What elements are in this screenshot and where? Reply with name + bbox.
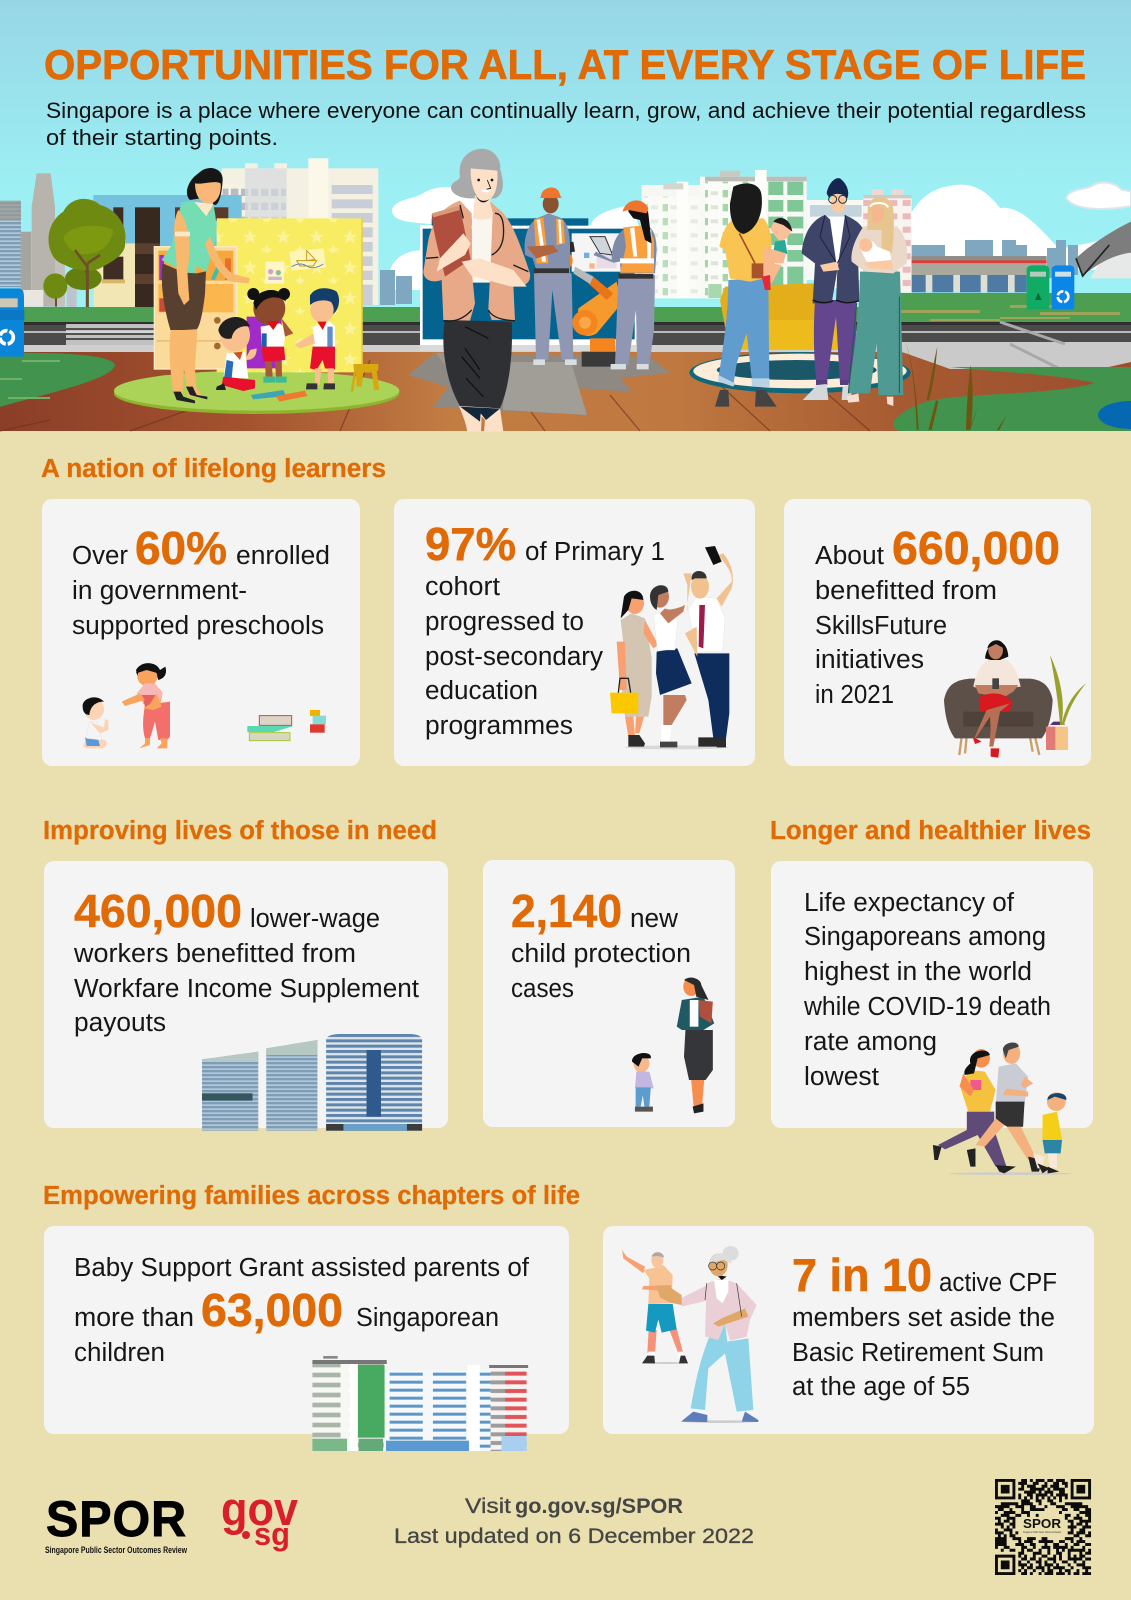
left lawn (0, 353, 115, 407)
stat text: of Primary 1 (525, 538, 665, 566)
billboard and workers (420, 149, 657, 432)
woman with hijab and baby (847, 197, 907, 406)
stat text: lowest (804, 1063, 879, 1091)
footer text: Visit (465, 1494, 511, 1518)
icon: seniors exercising (622, 1246, 758, 1423)
stat text: benefitted from (815, 577, 997, 605)
blue building (93, 195, 242, 307)
stat text (425, 518, 665, 740)
right apartment blocks (642, 170, 912, 298)
central woman with book (423, 149, 530, 432)
stat text: while COVID-19 death (803, 993, 1051, 1021)
stat text: more than (74, 1304, 194, 1332)
footer text (394, 1494, 754, 1548)
logo: SPOR: SPOR (46, 1491, 187, 1547)
heading: longer and healthier lives: Longer and healthier lives (770, 817, 1091, 845)
stat text: 2,140 (511, 885, 622, 937)
dark tower (0, 201, 21, 287)
central paving (408, 353, 670, 415)
stat text: programmes (425, 712, 573, 740)
stat text (815, 522, 1060, 709)
icon: students taking a selfie (610, 546, 733, 749)
blue recycling bin (0, 288, 24, 357)
stat text: initiatives (815, 646, 924, 674)
older woman (691, 1323, 753, 1412)
stat text: active CPF (939, 1269, 1057, 1297)
stat text: payouts (74, 1009, 166, 1037)
stat text: 63,000 (201, 1284, 343, 1336)
stat text: in 2021 (815, 681, 894, 709)
stat text: members set aside the (792, 1304, 1055, 1332)
distant train viaduct (912, 222, 1131, 309)
white apartment block (222, 168, 378, 305)
icon: children and toys (83, 663, 326, 748)
worker with tablet (590, 200, 657, 369)
stat text (74, 1254, 530, 1367)
child carried (771, 221, 792, 240)
stat text: at the age of 55 (792, 1373, 970, 1401)
stat text: enrolled (236, 542, 330, 570)
purple bag (247, 317, 282, 368)
stat text: workers benefitted from (73, 940, 356, 968)
clouds (390, 183, 1131, 290)
stat text: Basic Retirement Sum (792, 1339, 1044, 1367)
heading: lifelong learners: A nation of lifelong learners (41, 455, 386, 483)
footer text: Last updated on 6 December 2022 (394, 1524, 754, 1548)
stat text: in government- (72, 577, 247, 605)
stat text: 460,000 (74, 885, 242, 937)
icon: social worker and child (632, 977, 714, 1113)
stat text: 97% (425, 518, 516, 570)
student middle (656, 648, 692, 695)
icon: family jogging (933, 1043, 1071, 1175)
hero illustration (0, 0, 1131, 432)
family group (689, 178, 1006, 430)
stat text (72, 522, 330, 640)
logo: SPOR: Singapore Public Sector Outcomes Review (45, 1545, 187, 1556)
stat text: 7 in 10 (792, 1249, 932, 1301)
panel: SkillsFuture (784, 499, 1091, 766)
rug (114, 373, 399, 414)
worker with helmet (525, 188, 577, 365)
books on rug (251, 390, 286, 399)
stat text: post-secondary (425, 643, 603, 671)
stadium roof (1076, 222, 1131, 276)
stat text: Singaporeans among (804, 923, 1046, 951)
woman seen from behind (715, 183, 792, 407)
billboard (420, 225, 637, 345)
stat text: Over (72, 542, 129, 570)
robot arm (543, 242, 622, 367)
stat text: SkillsFuture (815, 612, 947, 640)
stat text (803, 889, 1051, 1091)
round mat (689, 352, 911, 393)
logo: gov.sg: sg (254, 1516, 290, 1552)
right lawn (893, 367, 1131, 431)
stat text: lower-wage (250, 905, 380, 933)
tree (71, 243, 102, 310)
woman runner (938, 1112, 1006, 1167)
stat text: Singaporean (356, 1304, 499, 1332)
wall drawings (265, 248, 326, 284)
stat text (73, 885, 419, 1037)
stat text: cohort (425, 573, 500, 601)
boy standing (295, 288, 339, 389)
stat text: 660,000 (892, 522, 1060, 574)
stat text (792, 1249, 1057, 1401)
stat text: new (630, 905, 679, 933)
yellow sofa (720, 283, 840, 350)
panel: CPF retirement sum (603, 1226, 1094, 1434)
heading: improving lives: Improving lives of those in need (43, 817, 437, 845)
QR code: Singapore Public Sector Outcomes Review (1023, 1530, 1062, 1534)
stat text: children (74, 1339, 165, 1367)
panel: baby support grant (44, 1226, 569, 1451)
child runner (1043, 1112, 1062, 1140)
icon: woman on armchair with plant (944, 640, 1086, 758)
small trees (53, 287, 59, 307)
subtitle (46, 98, 1086, 150)
older man (647, 1328, 683, 1353)
panel: preschool enrolment (42, 499, 360, 766)
girl (247, 288, 293, 383)
student right (694, 653, 729, 738)
heading: empowering families: Empowering families across chapters of life (43, 1182, 580, 1210)
stat text: rate among (804, 1028, 937, 1056)
man in suit (802, 178, 865, 400)
teacher (162, 168, 250, 403)
title: OPPORTUNITIES FOR ALL, AT EVERY STAGE OF LIFE (44, 41, 1086, 88)
stat text: highest in the world (804, 958, 1032, 986)
icon: HDB flats (312, 1356, 528, 1451)
student left (622, 655, 652, 717)
stat text: cases (511, 975, 574, 1003)
recycling bins (1027, 265, 1049, 309)
QR code (995, 1479, 1091, 1575)
subtitle: of their starting points. (46, 125, 278, 150)
yellow stool (351, 364, 379, 392)
grey tower (32, 173, 55, 307)
man runner (996, 1063, 1028, 1105)
footer text: go.gov.sg/SPOR (515, 1494, 683, 1518)
QR code: SPOR (1023, 1516, 1062, 1531)
sky (0, 0, 1131, 431)
stat text: supported preschools (72, 612, 324, 640)
boy kneeling (216, 317, 257, 391)
stat text: Workfare Income Supplement (74, 975, 419, 1003)
stat text: 60% (135, 522, 227, 574)
icon: office buildings (202, 1034, 422, 1131)
stat text (511, 885, 691, 1003)
preschool scene (0, 168, 399, 414)
subtitle: Singapore is a place where everyone can continually learn, grow, and achieve their potential regardless (46, 98, 1086, 123)
grass, road, ground (0, 293, 1131, 431)
panel: life expectancy (771, 861, 1093, 1175)
stat text: Baby Support Grant assisted parents of (74, 1254, 530, 1282)
panel: lower-wage workers (44, 861, 448, 1131)
bookshelf (154, 247, 237, 369)
reeds (905, 340, 1006, 430)
logo: gov.sg: gov (221, 1482, 298, 1535)
stat text: education (425, 677, 538, 705)
far skyline (380, 240, 1078, 305)
panel: primary 1 progression (394, 499, 755, 766)
stat text: Life expectancy of (804, 889, 1015, 917)
star wall (217, 218, 363, 372)
stat text: progressed to (425, 608, 584, 636)
stat text: About (815, 542, 884, 570)
low white block (23, 290, 43, 307)
panel: child protection (483, 860, 735, 1127)
stat text: child protection (511, 940, 691, 968)
left city buildings (0, 158, 378, 310)
